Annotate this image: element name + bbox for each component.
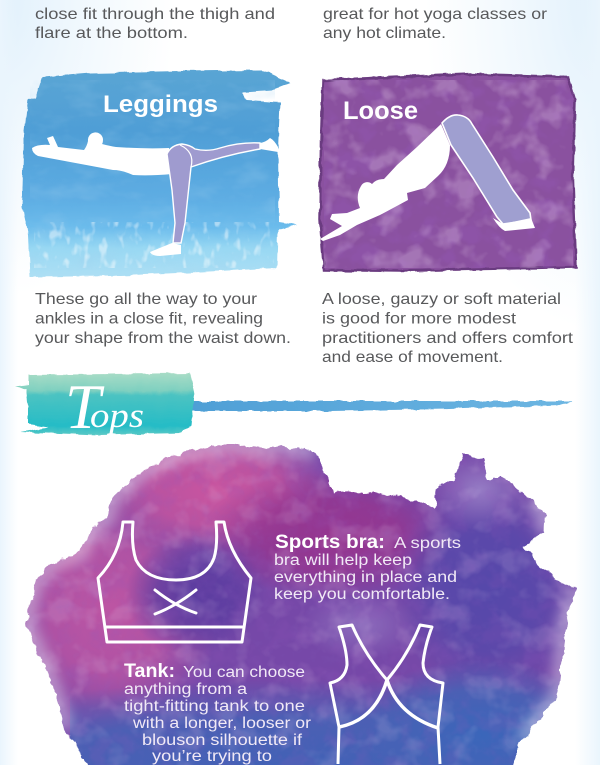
watercolor blob: tops [25,444,577,765]
panel: loose [320,74,576,271]
icon: sports bra [98,522,251,642]
text: loose description: A loose, gauzy or soft material [322,291,561,308]
text: leggings description: ankles in a close fit, revealing [35,310,263,328]
text: sports bra: keep you comfortable. [274,586,450,603]
text: tank: blouson silhouette if [142,732,303,749]
text: tank: Tank: [124,661,175,682]
text: sports bra: A sports [394,535,461,552]
watercolor swatch: loose [320,74,576,271]
figure: downward dog pose [320,115,535,241]
figure loose pants [442,115,531,224]
figure feet [150,138,278,256]
text: sports bra: Sports bra: [275,532,385,553]
text: sports bra [274,532,461,603]
text: shorts description end: any hot climate. [323,25,446,42]
heading: Loose: Loose [343,97,418,125]
text: sports bra: bra will help keep [274,552,412,569]
panel: leggings [22,70,298,277]
icon: tank top [330,625,443,764]
figure foot [493,218,535,231]
text: tank: You can choose [183,664,305,681]
figure upper body [320,124,450,241]
text: leggings description: These go all the way to your [35,291,258,308]
text: tank: with a longer, looser or [132,715,311,732]
brush stroke banner [15,373,195,435]
figure leggings [167,143,260,243]
pale watercolor rim [27,445,576,740]
text: tank [124,661,311,765]
text: loose description: practitioners and offers comfort [322,330,574,347]
text: tank: you’re trying to [152,748,272,765]
text: leggings description: your shape from the waist down. [35,330,291,347]
section header: Tops [15,371,572,442]
figure upper body [32,132,172,175]
text: tank: tight-fitting tank to one [124,698,305,715]
brush stroke rule [190,401,572,411]
text: loose description: and ease of movement. [322,349,503,366]
pale speckled wash at the swatch bottom [34,222,274,268]
watercolor swatch: leggings [22,70,298,277]
watercolor mottling [30,80,275,270]
text: sports bra: everything in place and [274,569,457,586]
text: shorts description end: great for hot yoga classes or [323,6,548,23]
text: loose description: is good for more modest [322,310,517,328]
text: tank: anything from a [124,681,247,698]
figure: warrior three pose [32,132,278,256]
thigh seam [180,145,192,167]
text: flare pants description end: close fit through the thigh and [35,6,275,23]
heading: Tops: T [65,371,105,442]
text: flare pants description end: flare at the bottom. [35,25,188,42]
heading: Leggings: Leggings [103,91,218,118]
watercolor mottling [324,80,573,268]
heading: Tops: ops [90,396,144,435]
